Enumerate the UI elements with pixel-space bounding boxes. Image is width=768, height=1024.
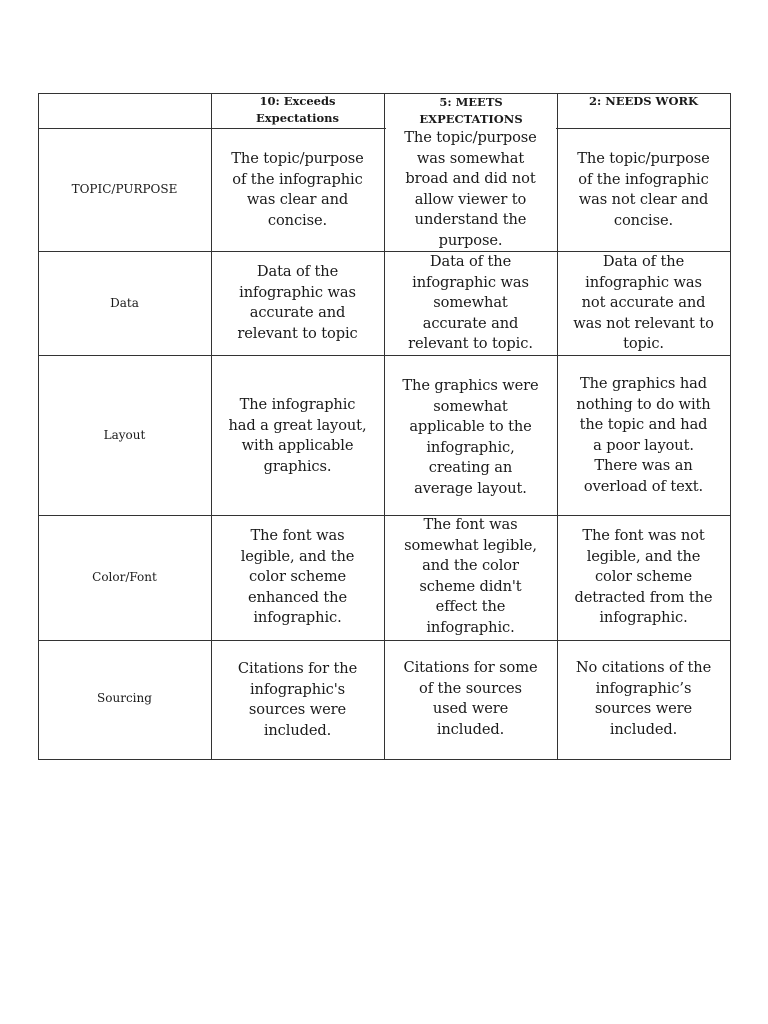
cell r2c4 xyxy=(573,253,714,352)
cell r1c3: purpose. xyxy=(439,232,502,249)
cell r3c3: applicable to the xyxy=(409,418,532,435)
cell r2c4: Data of the xyxy=(603,253,684,270)
cell r1c2: The topic/purpose xyxy=(231,150,364,167)
cell r5c2: infographic's xyxy=(250,681,345,698)
cell r1c2 xyxy=(231,150,364,229)
cell r1c3: broad and did not xyxy=(405,170,536,187)
header: exceeds xyxy=(256,94,339,125)
cell r5c4 xyxy=(576,659,711,738)
cell r1c3 xyxy=(404,129,537,249)
cell r1c2: of the infographic xyxy=(232,171,363,188)
cell r2c3 xyxy=(408,253,533,352)
cell r2c2: relevant to topic xyxy=(237,325,358,342)
cell r5c3 xyxy=(404,659,538,738)
cell r5c3: used were xyxy=(433,700,508,717)
cell r1c3: understand the xyxy=(415,211,526,228)
cell r1c2: concise. xyxy=(268,212,327,229)
cell r3c3: creating an xyxy=(429,459,512,476)
cell r3c2: with applicable xyxy=(242,437,353,454)
cell r3c2: had a great layout, xyxy=(228,417,366,434)
cell r1c4: The topic/purpose xyxy=(577,150,710,167)
cell r3c2: graphics. xyxy=(264,458,331,475)
cell r2c4: infographic was xyxy=(585,274,702,291)
cell r5c3: of the sources xyxy=(419,680,522,697)
cell r4c3: The font was xyxy=(424,516,517,533)
cell r2c2: Data of the xyxy=(257,263,338,280)
cell r1c4: of the infographic xyxy=(578,171,709,188)
cell r3c4: a poor layout. xyxy=(593,437,694,454)
cell r2c2: accurate and xyxy=(250,304,345,321)
cell r3c4 xyxy=(576,375,711,495)
cell r3c3: average layout. xyxy=(414,480,527,497)
cell r4c2: infographic. xyxy=(253,609,342,626)
cell r2c2: infographic was xyxy=(239,284,356,301)
label: layout: Layout xyxy=(104,428,145,442)
cell r4c4: detracted from the xyxy=(575,589,712,606)
header: exceeds: Expectations xyxy=(256,111,339,125)
cell r4c4: color scheme xyxy=(595,568,692,585)
cell r5c4: included. xyxy=(610,721,677,738)
cell r4c3: scheme didn't xyxy=(419,578,522,595)
cell r3c2 xyxy=(228,396,366,475)
cell r3c4: overload of text. xyxy=(584,478,703,495)
cell r4c3: and the color xyxy=(422,557,519,574)
cell r5c2: Citations for the xyxy=(238,660,357,677)
cell r5c4: No citations of the xyxy=(576,659,711,676)
cell r4c4: legible, and the xyxy=(587,548,700,565)
cell r2c3: accurate and xyxy=(423,315,518,332)
cell r1c3: was somewhat xyxy=(417,150,524,167)
cell r3c4: There was an xyxy=(594,457,693,474)
cell r2c3: Data of the xyxy=(430,253,511,270)
label: topic/purpose: TOPIC/PURPOSE xyxy=(72,182,177,196)
cell r2c3: somewhat xyxy=(433,294,508,311)
cell r2c4: was not relevant to xyxy=(573,315,714,332)
cell r4c3: effect the xyxy=(436,598,505,615)
cell r5c3: Citations for some xyxy=(404,659,538,676)
cell r5c4: sources were xyxy=(595,700,692,717)
cell r1c4: was not clear and xyxy=(579,191,708,208)
cell r4c3 xyxy=(404,516,537,636)
cell r4c2: color scheme xyxy=(249,568,346,585)
label: color/font: Color/Font xyxy=(92,570,157,584)
cell r3c2: The infographic xyxy=(240,396,355,413)
cell r1c4 xyxy=(577,150,710,229)
header: meets: 5: MEETS xyxy=(439,95,503,109)
cell r4c4: infographic. xyxy=(599,609,688,626)
cell r5c3: included. xyxy=(437,721,504,738)
cell r3c4: The graphics had xyxy=(580,375,707,392)
cell r3c3: The graphics were xyxy=(402,377,539,394)
cell r5c2: sources were xyxy=(249,701,346,718)
cell r5c2: included. xyxy=(264,722,331,739)
cell r3c4: the topic and had xyxy=(580,416,707,433)
cell r4c2 xyxy=(241,527,354,626)
header: exceeds: 10: Exceeds xyxy=(259,94,336,108)
cell r4c4 xyxy=(575,527,712,626)
cell r3c3: somewhat xyxy=(433,398,508,415)
cell r2c3: relevant to topic. xyxy=(408,335,533,352)
cell r2c4: not accurate and xyxy=(582,294,705,311)
label: data: Data xyxy=(110,296,139,310)
cell r2c3: infographic was xyxy=(412,274,529,291)
cell r3c3: infographic, xyxy=(426,439,515,456)
cell r1c3: The topic/purpose xyxy=(404,129,537,146)
cell r4c3: somewhat legible, xyxy=(404,537,537,554)
header: needs work: 2: NEEDS WORK xyxy=(589,94,698,108)
cell r1c3: allow viewer to xyxy=(415,191,526,208)
header: meets: EXPECTATIONS xyxy=(419,112,523,126)
cell r3c3 xyxy=(402,377,539,497)
cell r1c4: concise. xyxy=(614,212,673,229)
cell r4c4: The font was not xyxy=(582,527,705,544)
cell r4c2: legible, and the xyxy=(241,548,354,565)
cell r4c2: enhanced the xyxy=(248,589,347,606)
label: sourcing: Sourcing xyxy=(97,691,152,705)
cell r2c2 xyxy=(237,263,358,342)
cell r5c4: infographic’s xyxy=(596,680,691,697)
cell r4c2: The font was xyxy=(250,527,344,544)
cell r2c4: topic. xyxy=(623,335,664,352)
cell r1c2: was clear and xyxy=(247,191,348,208)
cell r4c3: infographic. xyxy=(426,619,515,636)
cell r5c2 xyxy=(238,660,357,739)
cell r3c4: nothing to do with xyxy=(576,396,711,413)
header: meets xyxy=(386,94,556,130)
